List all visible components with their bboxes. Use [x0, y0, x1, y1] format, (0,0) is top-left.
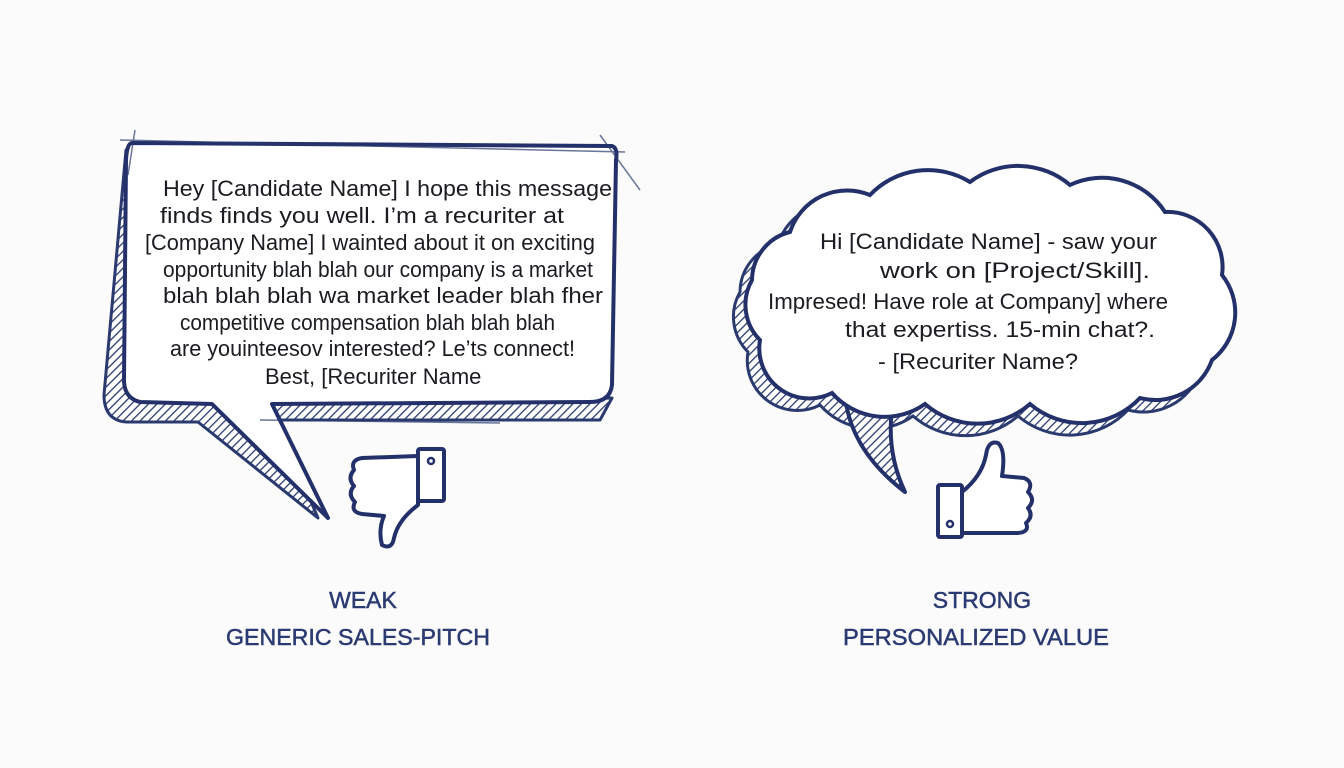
label: weak — [226, 587, 490, 650]
panel: weak speech bubble — [104, 130, 640, 518]
icon: thumbs up — [938, 442, 1032, 537]
bubble outline — [124, 143, 616, 518]
message text: generic pitch: Best, [Recuriter Name — [265, 364, 481, 389]
message text: personalized: Hi [Candidate Name] - saw your — [820, 229, 1157, 254]
message text: personalized — [768, 229, 1168, 374]
cloud outline — [745, 166, 1235, 424]
cloud tail — [845, 395, 905, 492]
label: weak: WEAK — [329, 587, 398, 613]
message text: personalized: work on [Project/Skill]. — [879, 258, 1150, 283]
message text: generic pitch — [145, 176, 612, 389]
message text: personalized: Impresed! Have role at Company] where — [768, 289, 1168, 314]
label: strong: PERSONALIZED VALUE — [843, 624, 1109, 650]
message text: generic pitch: blah blah blah wa market leader blah fher — [163, 283, 603, 308]
message text: generic pitch: finds finds you well. I’m a recuriter at — [160, 203, 564, 228]
icon: thumbs down — [350, 449, 444, 546]
message text: generic pitch: competitive compensation blah blah blah — [180, 310, 555, 335]
bubble shadow — [104, 150, 612, 518]
message text: generic pitch: Hey [Candidate Name] I hope this message — [163, 176, 612, 201]
label: weak: GENERIC SALES-PITCH — [226, 624, 490, 650]
message text: personalized: that expertiss. 15-min chat?. — [845, 317, 1155, 342]
message text: generic pitch: are youinteesov interested? Le’ts connect! — [170, 336, 575, 361]
cloud shadow — [733, 178, 1223, 436]
label: strong: STRONG — [933, 587, 1031, 613]
message text: generic pitch: opportunity blah blah our company is a market — [163, 257, 593, 282]
message text: generic pitch: [Company Name] I wainted about it on exciting — [145, 230, 595, 255]
panel: strong cloud bubble — [733, 166, 1235, 492]
label: strong — [843, 587, 1109, 650]
message text: personalized: - [Recuriter Name? — [878, 349, 1078, 374]
